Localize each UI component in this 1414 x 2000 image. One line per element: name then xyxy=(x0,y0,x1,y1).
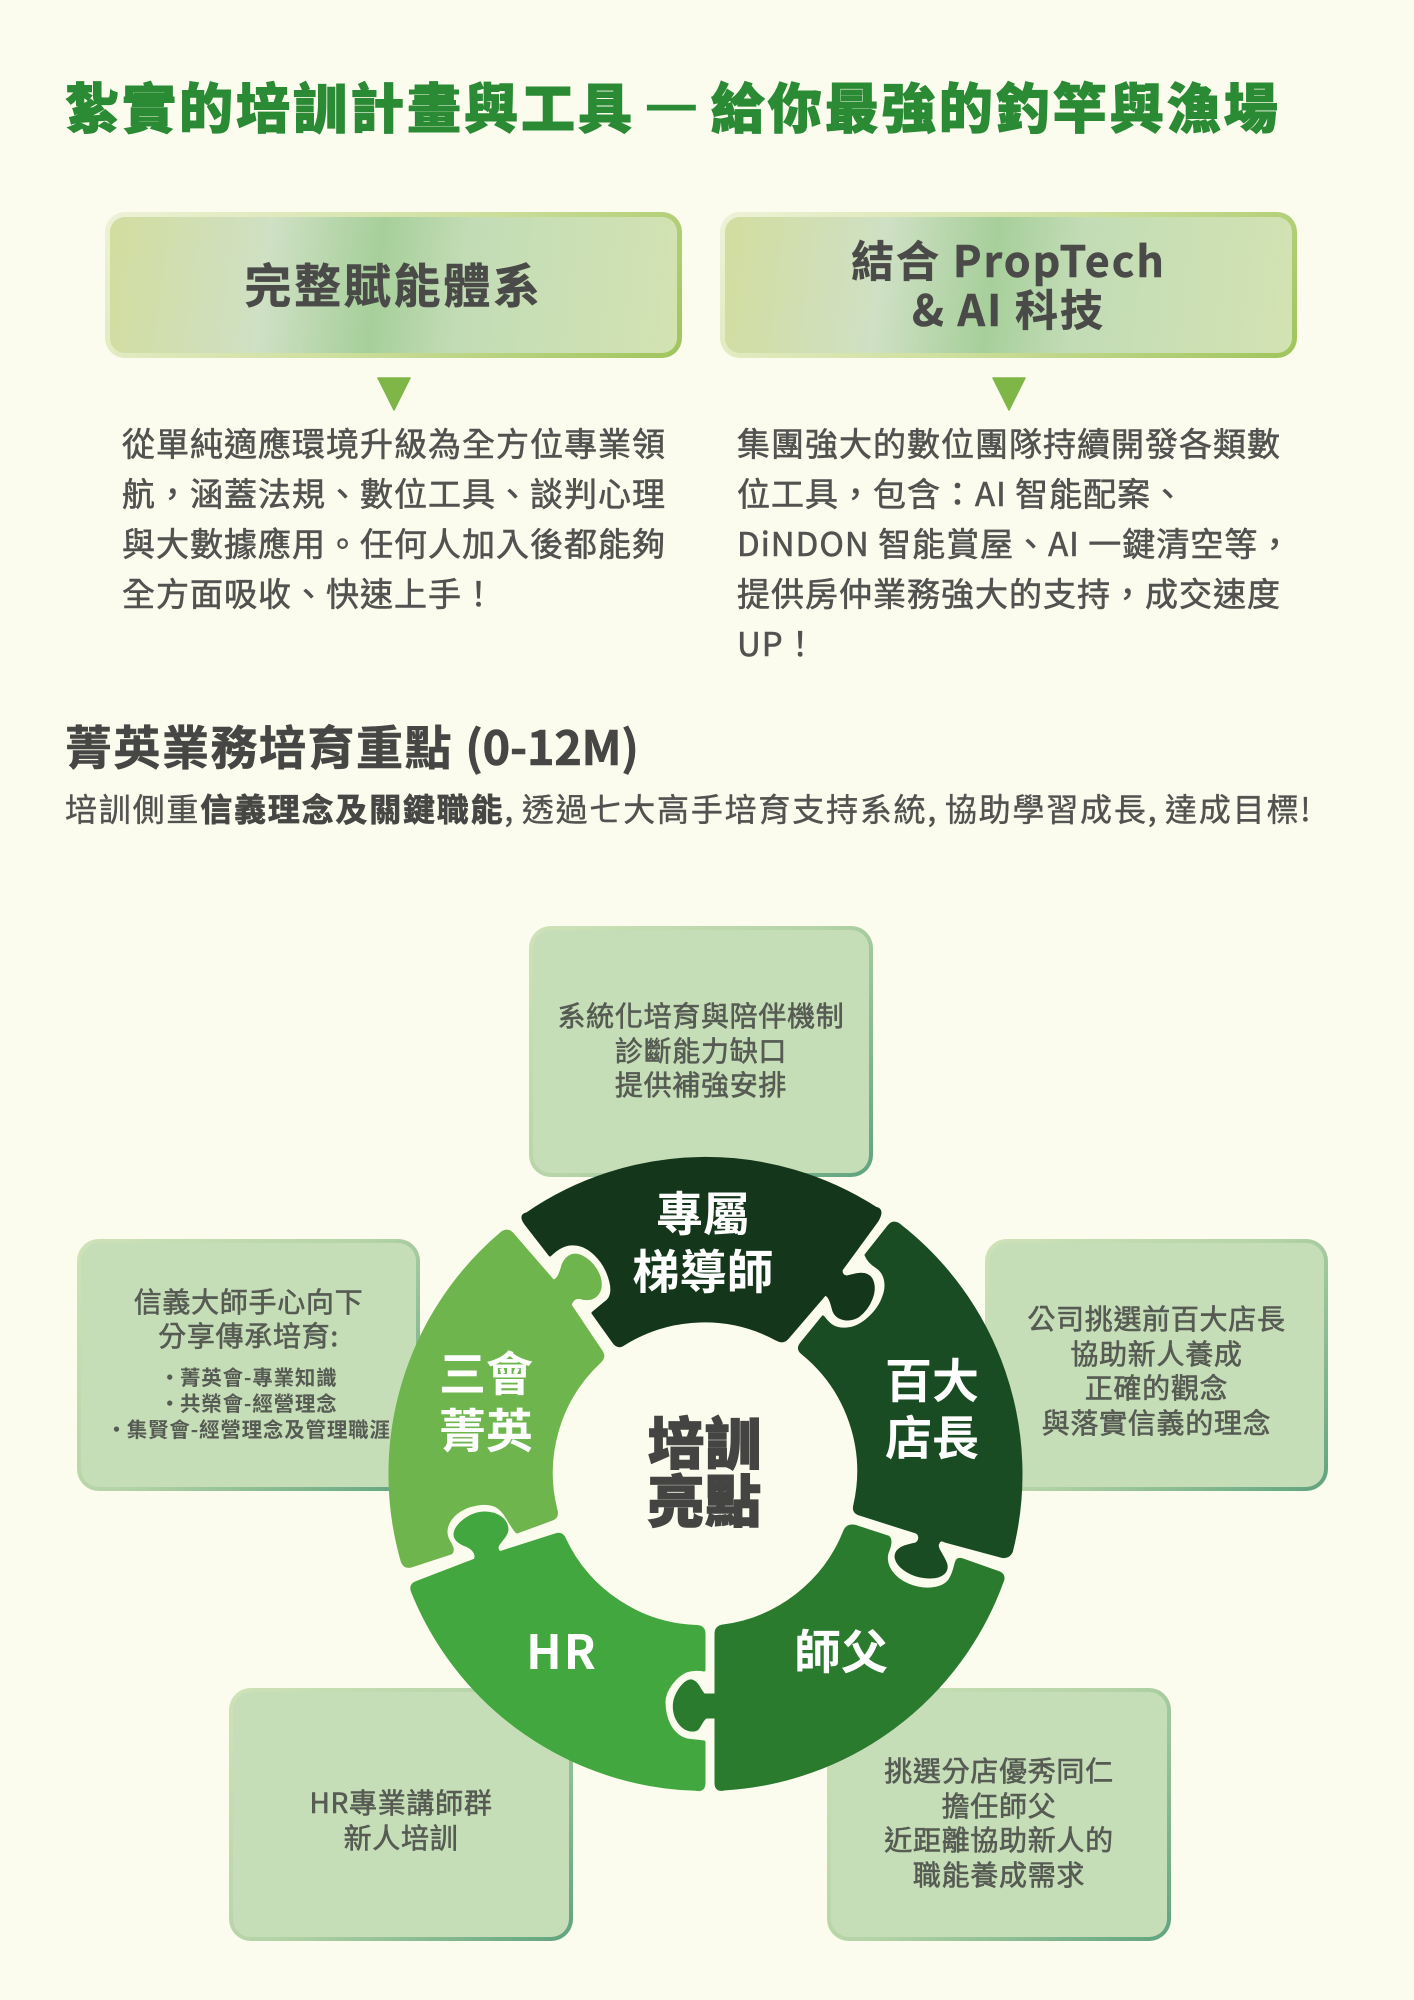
puzzle piece: master: 師父 xyxy=(794,1614,888,1683)
section heading: 菁英業務培育重點 (0-12M) xyxy=(65,710,639,779)
center label: 亮點 xyxy=(648,1458,762,1539)
text block: proptech description: DiNDON 智能賞屋、AI 一鍵清空等， xyxy=(737,518,1292,566)
text block: proptech description: UP！ xyxy=(737,618,818,666)
text: master xyxy=(884,1750,1114,1894)
text: HR: HR專業講師群 xyxy=(309,1782,493,1822)
icon: arrow right xyxy=(992,377,1026,411)
text: three societies list: ·菁英會-專業知識 xyxy=(160,1361,338,1391)
text: master: 挑選分店優秀同仁 xyxy=(884,1750,1114,1790)
text block: proptech description xyxy=(737,418,1292,666)
text: master: 擔任師父 xyxy=(942,1784,1056,1824)
puzzle piece: HR xyxy=(412,1513,704,1790)
text block: empowerment description xyxy=(122,418,666,616)
puzzle piece: three societies: 菁英 xyxy=(439,1393,533,1462)
puzzle piece: top store managers: 百大 xyxy=(885,1343,979,1412)
title: 紮實的培訓計畫與工具 — 給你最強的釣竿與漁場 xyxy=(65,65,1281,144)
panel: proptech heading xyxy=(720,212,1297,358)
text: mentor coach: 系統化培育與陪伴機制 xyxy=(557,995,844,1035)
text block: proptech description: 集團強大的數位團隊持續開發各類數 xyxy=(737,418,1281,466)
text: three societies intro: 分享傳承培育: xyxy=(158,1314,339,1354)
puzzle piece: three societies: 三會 xyxy=(439,1336,533,1405)
heading: proptech and AI: & AI 科技 xyxy=(912,277,1105,339)
center label: 培訓 xyxy=(648,1400,762,1481)
text: three societies intro xyxy=(134,1281,363,1354)
panel: HR description xyxy=(229,1688,573,1941)
puzzle piece: mentor coach: 梯導師 xyxy=(632,1234,774,1303)
text: three societies intro: 信義大師手心向下 xyxy=(134,1281,363,1321)
text: top store managers: 協助新人養成 xyxy=(1070,1332,1243,1372)
puzzle piece: three societies xyxy=(390,1231,603,1566)
heading: proptech and AI xyxy=(851,228,1166,339)
panel: mentor coach description xyxy=(529,926,873,1177)
text block: proptech description: 位工具，包含：AI 智能配案、 xyxy=(737,468,1185,516)
text: three societies list: ·共榮會-經營理念 xyxy=(160,1387,338,1417)
text block: empowerment description: 航，涵蓋法規、數位工具、談判心理 xyxy=(122,468,666,516)
text: three societies list: ·集賢會-經營理念及管理職涯 xyxy=(106,1413,391,1443)
text: HR xyxy=(309,1782,493,1856)
text: top store managers: 與落實信義的理念 xyxy=(1042,1402,1271,1442)
icon: arrow left xyxy=(377,377,411,411)
text: mentor coach xyxy=(557,995,844,1104)
text: three societies list xyxy=(106,1361,391,1443)
section subtitle: 培訓側重信義理念及關鍵職能,透過七大高手培育支持系統,協助學習成長,達成目標! xyxy=(65,785,1312,831)
text: master: 近距離協助新人的 xyxy=(884,1819,1114,1859)
puzzle piece: mentor coach: 專屬 xyxy=(656,1176,750,1245)
panel: complete empowerment heading xyxy=(105,212,682,358)
text: top store managers xyxy=(1027,1298,1286,1442)
puzzle piece: top store managers xyxy=(799,1223,1021,1577)
text: HR: 新人培訓 xyxy=(344,1816,458,1856)
puzzle piece: master xyxy=(674,1526,1003,1789)
puzzle piece: mentor coach xyxy=(523,1158,880,1346)
text block: proptech description: 提供房仲業務強大的支持，成交速度 xyxy=(737,568,1281,616)
center label xyxy=(648,1400,762,1539)
text block: empowerment description: 全方面吸收、快速上手！ xyxy=(122,568,496,616)
text: mentor coach: 診斷能力缺口 xyxy=(615,1030,787,1070)
text: top store managers: 公司挑選前百大店長 xyxy=(1027,1298,1286,1338)
text: master: 職能養成需求 xyxy=(913,1854,1085,1894)
text: top store managers: 正確的觀念 xyxy=(1085,1367,1228,1407)
puzzle piece: top store managers: 店長 xyxy=(885,1400,979,1469)
heading: proptech and AI: 結合 PropTech xyxy=(851,228,1166,290)
text block: empowerment description: 與大數據應用。任何人加入後都能夠 xyxy=(122,518,666,566)
text: mentor coach: 提供補強安排 xyxy=(615,1064,787,1104)
text block: empowerment description: 從單純適應環境升級為全方位專業領 xyxy=(122,418,666,466)
panel: three societies description xyxy=(77,1239,420,1491)
puzzle piece: HR: HR xyxy=(526,1614,598,1683)
heading: complete empowerment: 完整賦能體系 xyxy=(244,248,543,317)
panel: top store managers description xyxy=(985,1239,1328,1491)
panel: master description xyxy=(827,1688,1171,1941)
